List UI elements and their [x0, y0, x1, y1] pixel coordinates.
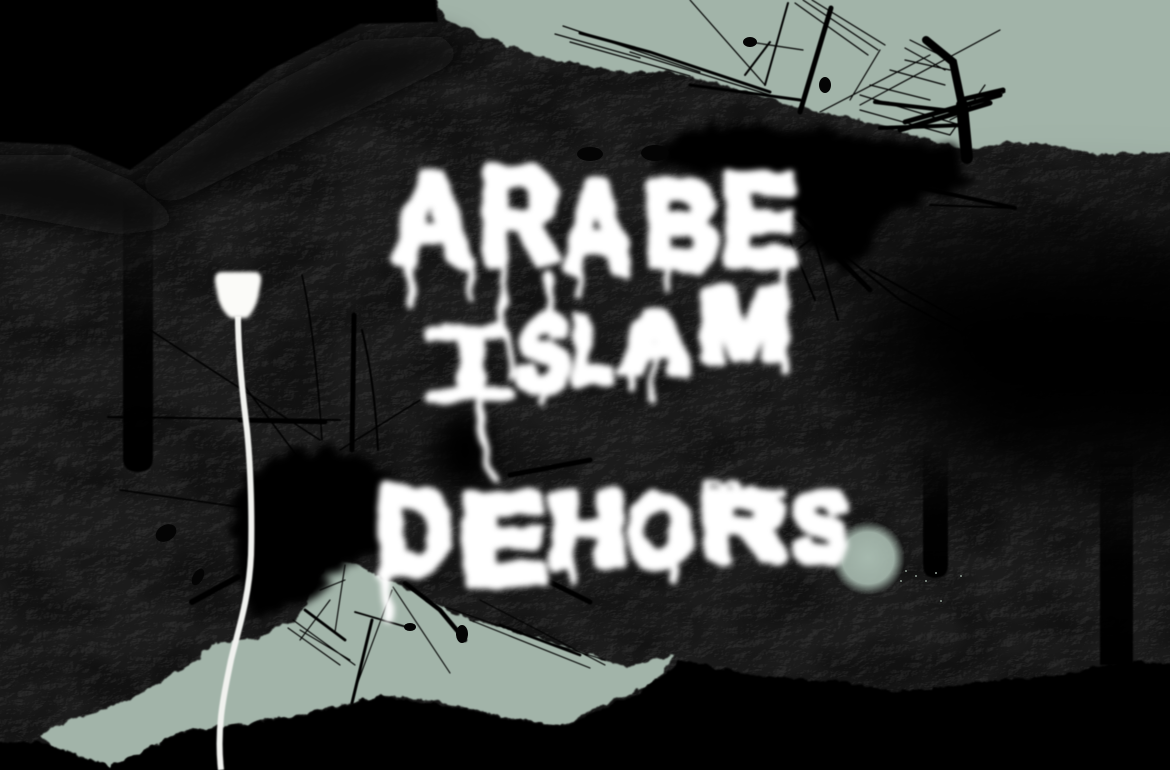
title word: ISLAM: I: [440, 303, 502, 422]
ink splatter: lower left: [108, 275, 605, 703]
title word: ISLAM: M: [698, 269, 790, 379]
title word: DEHORS: R: [700, 475, 786, 577]
ink splatter: upper right: [555, 0, 1015, 345]
title word: ISLAM: [440, 269, 790, 422]
title word: DEHORS: E: [460, 470, 548, 606]
title word: ARABE: [391, 142, 798, 300]
title word: ISLAM: S: [518, 297, 570, 413]
scribble above R: [705, 481, 785, 500]
dark mass: [660, 122, 975, 280]
title word: DEHORS: O: [629, 475, 691, 587]
panel: top left black shadow: [0, 0, 470, 205]
title word: ISLAM: L: [572, 298, 612, 400]
panel: bottom black torn paper: [0, 660, 1170, 770]
title: spray painted words: [376, 142, 849, 615]
title word: ARABE: R: [480, 142, 558, 288]
dark mass: [235, 450, 395, 620]
panel: top right pale green paper: [425, 0, 1170, 155]
paint drips: dark vertical runs: [123, 190, 1133, 665]
streaks and brush marks: [108, 275, 605, 703]
title word: DEHORS: D: [376, 464, 452, 598]
drips of DEHORS: [388, 565, 675, 615]
spray speckle: [900, 570, 962, 602]
title word: DEHORS: [376, 464, 849, 606]
panel: bottom pale green paper: [40, 560, 675, 767]
drips of ISLAM: [480, 365, 653, 480]
title word: DEHORS: S: [793, 472, 849, 582]
title word: ARABE: A: [562, 154, 632, 300]
title word: ISLAM: A: [620, 296, 690, 390]
title word: ARABE: B: [645, 157, 719, 293]
serif bars of I: [430, 330, 510, 396]
panel: dark right shadow: [850, 230, 1170, 480]
spray dot: pale green: [831, 521, 962, 602]
title word: ARABE: A: [391, 147, 472, 290]
dark smudge right of I: [431, 408, 499, 492]
title word: ARABE: E: [722, 148, 798, 294]
white spray cap: [215, 272, 261, 318]
panel: left dark shadow band: [0, 155, 190, 235]
drips of ARABE: [407, 262, 786, 376]
title word: DEHORS: H: [549, 474, 625, 586]
white drip line: [220, 316, 251, 770]
streaks and brush marks: [555, 0, 1015, 345]
